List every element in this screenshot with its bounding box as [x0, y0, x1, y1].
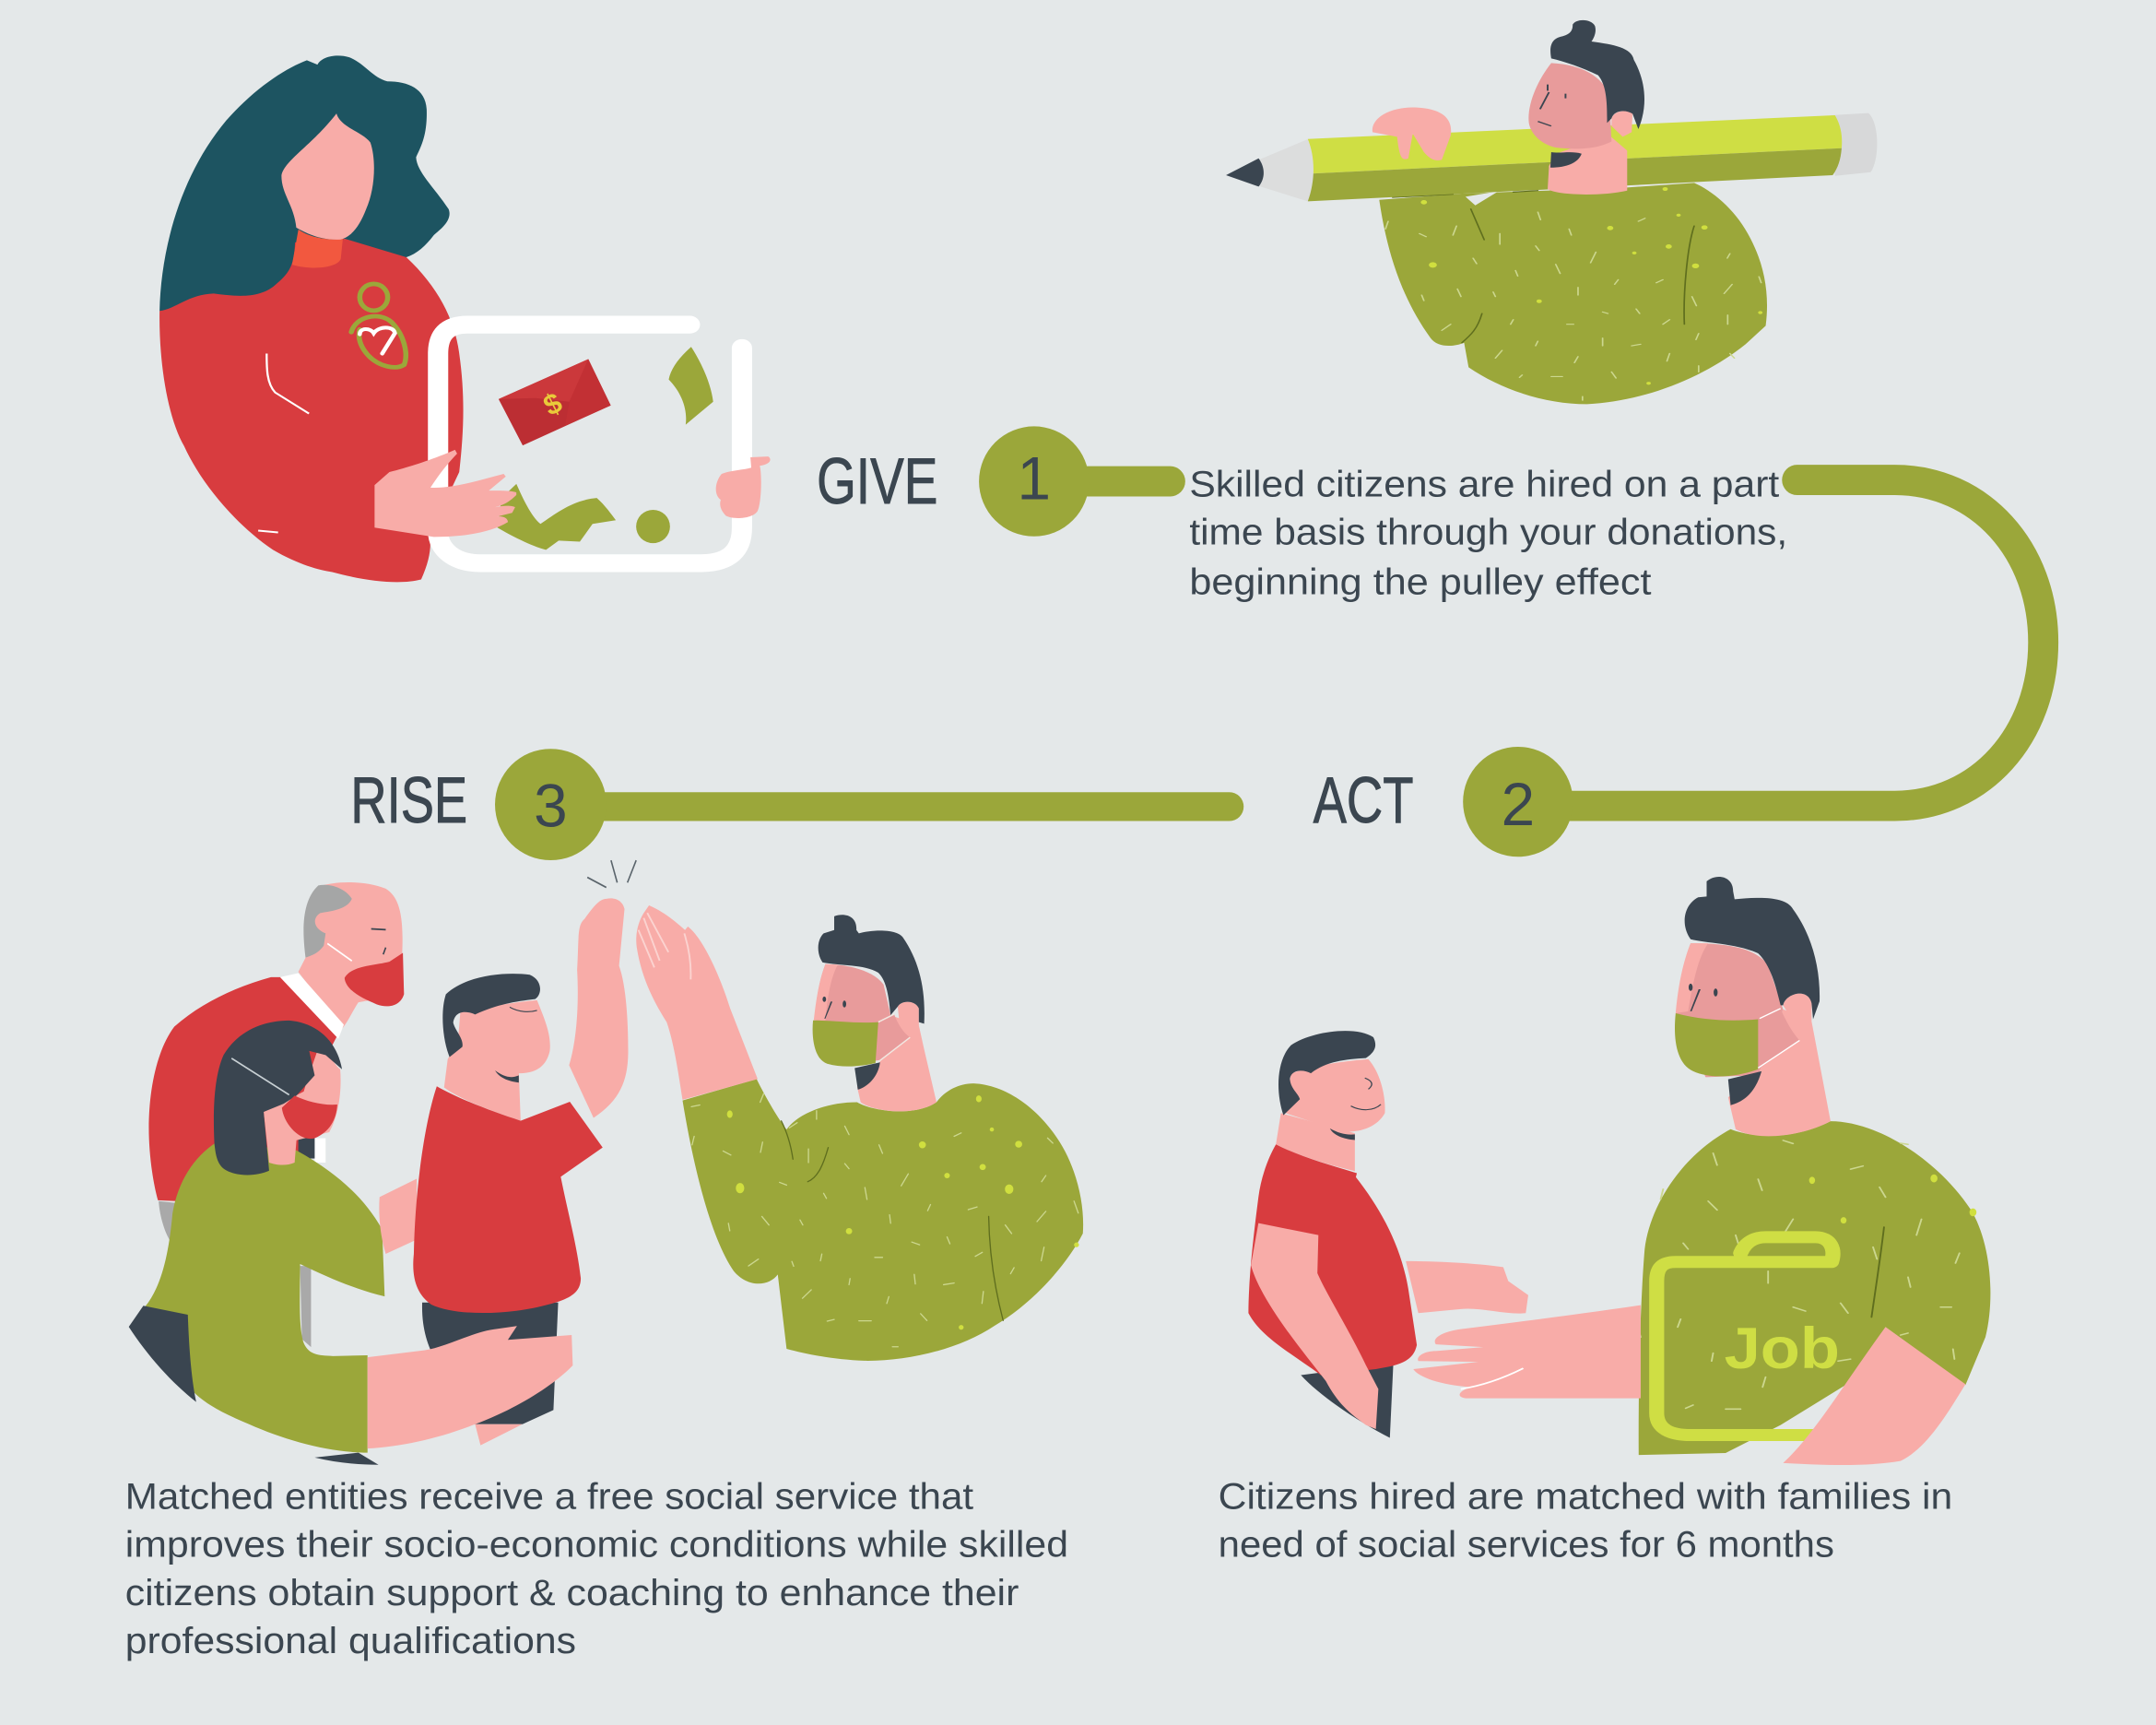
- step 1 badge: [979, 426, 1089, 537]
- connector from step 1 text around to step 2: [1554, 480, 2044, 806]
- high five man face: [815, 964, 890, 1067]
- job man cheek: [1758, 1010, 1799, 1069]
- high five man green mask: [813, 1021, 878, 1067]
- illustration: citizen matched with job: [1248, 877, 1990, 1465]
- boy eye line: [510, 1007, 537, 1011]
- mask strings: [1758, 1009, 1799, 1068]
- job label on briefcase: Job: [1725, 1317, 1840, 1381]
- woman left hand: [374, 450, 516, 537]
- boy face: [1286, 1059, 1385, 1131]
- text: step 2 description: [1219, 1475, 1952, 1565]
- boy dark trousers: [1301, 1363, 1394, 1438]
- illustration: family with masks and boy: [129, 860, 636, 1465]
- job man eyes and nose: [1689, 984, 1717, 1011]
- boy beard line: [1330, 1128, 1355, 1140]
- sweater fold lines: [258, 353, 309, 533]
- heading: ACT: ACT: [1314, 764, 1413, 836]
- heart logo badge: [351, 284, 406, 367]
- woman dark skirt piece: [129, 1306, 379, 1465]
- high five man green sweater: [682, 1079, 1083, 1361]
- shirt dots: [1809, 1175, 1976, 1223]
- boy leg: [475, 1424, 523, 1446]
- text: step 1 description: Skilled citizens are hired on a part: [1189, 463, 1779, 504]
- boy smile and nose: [1351, 1078, 1381, 1110]
- arm gap: [1466, 191, 1499, 206]
- step 3 badge: 3: [534, 772, 568, 839]
- text: step 3 description: professional qualifications: [125, 1620, 576, 1661]
- red envelope: [499, 360, 611, 445]
- boy raised arm: [569, 898, 628, 1118]
- dark shadow behind woman: [299, 1139, 314, 1159]
- elder grey trousers: [159, 1201, 311, 1347]
- job man outstretched arm and hand: [1413, 1306, 1641, 1399]
- high five man cheek: [878, 1014, 910, 1061]
- finger lines: [639, 913, 690, 979]
- text: step 3 description: [125, 1475, 1068, 1661]
- boy hair: [442, 974, 540, 1057]
- man ear: [1611, 112, 1632, 136]
- shirt crease: [1871, 1227, 1884, 1317]
- man neck: [1548, 136, 1627, 195]
- elder face details: [371, 928, 385, 954]
- woman neck and face: [264, 1043, 341, 1164]
- step 2 badge: [1463, 747, 1573, 857]
- high five spark lines: [587, 860, 636, 888]
- elder head: [299, 882, 404, 1029]
- eyes and nose: [822, 997, 846, 1019]
- illustration: man giving high five: [636, 905, 1083, 1361]
- pencil: [1226, 113, 1877, 201]
- woman dark hair: [214, 1021, 342, 1175]
- man green sweater: [1379, 183, 1767, 404]
- text: step 3 description: improves their socio-economic conditions while skilled: [125, 1524, 1068, 1565]
- boy dark trousers: [422, 1303, 559, 1424]
- job man neck: [1728, 1010, 1831, 1136]
- text: step 1 description: time basis through your donations,: [1189, 512, 1787, 553]
- elder red mask: [345, 952, 404, 1006]
- dollar sign on envelope: $: [538, 386, 567, 422]
- green banknote bottom: [498, 484, 616, 549]
- sweater creases: [782, 1121, 1003, 1320]
- text: step 2 description: need of social services for 6 months: [1219, 1524, 1834, 1565]
- hand highlight: [1461, 1368, 1524, 1389]
- heading: GIVE: GIVE: [817, 445, 937, 517]
- step 1 badge: 1: [1018, 444, 1051, 512]
- man hair: [1550, 20, 1644, 129]
- sweater speckles: [1385, 212, 1761, 400]
- illustration: woman donating through a frame: [159, 55, 771, 582]
- green banknote top: [668, 347, 713, 425]
- mask string and eye: [231, 1058, 289, 1094]
- lime job briefcase: [1656, 1237, 1832, 1435]
- man hand: [1373, 108, 1451, 160]
- text: step 3 description: citizens obtain support & coaching to enhance their: [125, 1572, 1019, 1613]
- high five man beard: [854, 1062, 880, 1090]
- woman green shirt: [146, 1142, 384, 1453]
- job man hair: [1685, 877, 1820, 1020]
- job man green shirt: [1639, 1121, 1990, 1455]
- text: step 1 description: [1189, 463, 1787, 602]
- woman right hand: [716, 456, 771, 518]
- woman arm hugging boy: [368, 1326, 572, 1448]
- man beard: [1550, 152, 1582, 168]
- text: step 2 description: Citizens hired are matched with families in: [1219, 1475, 1952, 1517]
- elder white collar: [280, 973, 344, 1039]
- job man ear: [1783, 994, 1811, 1029]
- shirt speckles: [1638, 1140, 1960, 1409]
- connector from step 2 gap to step 3: [591, 797, 1230, 816]
- sweater dots: [1420, 187, 1762, 384]
- job man face: [1676, 943, 1783, 1077]
- step 2 badge: 2: [1502, 771, 1535, 838]
- job man mask: [1675, 1013, 1758, 1076]
- man face: [1528, 63, 1611, 148]
- elder grey hair: [303, 885, 352, 958]
- text: step 1 description: beginning the pulley effect: [1189, 561, 1652, 602]
- woman face: [281, 113, 374, 240]
- mask strings: [878, 1014, 910, 1061]
- man facial details: [1537, 85, 1565, 126]
- boy neck: [444, 1043, 521, 1121]
- sweater creases: [1393, 191, 1694, 343]
- boy right arm: [1406, 1261, 1528, 1314]
- job man sleeve arm: [1783, 1327, 1965, 1465]
- text: step 3 description: Matched entities receive a free social service that: [125, 1475, 973, 1517]
- illustration: man carrying a pencil: [1226, 20, 1877, 404]
- boy red shirt: [1248, 1144, 1417, 1375]
- sweater speckles: [691, 1093, 1078, 1347]
- boy left arm: [1251, 1223, 1378, 1429]
- connector from step 1: [1073, 471, 1170, 491]
- boy red shirt: [413, 1086, 603, 1313]
- step 3 badge: [495, 749, 607, 860]
- high five man hair: [819, 915, 925, 1023]
- woman red mask: [282, 1095, 337, 1139]
- heading: RISE: RISE: [350, 764, 467, 836]
- white donation frame: [438, 325, 742, 563]
- woman collar: [292, 230, 343, 267]
- sweater dots: [727, 1095, 1079, 1329]
- woman hair: [159, 55, 450, 311]
- high five man arm: [636, 905, 758, 1100]
- boy neck: [1276, 1113, 1355, 1171]
- elder red shirt: [148, 977, 342, 1201]
- boy beard line: [495, 1070, 519, 1082]
- woman red sweater: [159, 239, 464, 582]
- white undershirt strip: [314, 1139, 325, 1163]
- high five man ear: [898, 1002, 919, 1034]
- high five man neck: [857, 1015, 937, 1111]
- boy face: [457, 1000, 550, 1073]
- boy hand on woman: [379, 1179, 417, 1254]
- boy hair: [1278, 1031, 1375, 1116]
- green coin: [636, 510, 670, 543]
- job man beard: [1728, 1071, 1761, 1105]
